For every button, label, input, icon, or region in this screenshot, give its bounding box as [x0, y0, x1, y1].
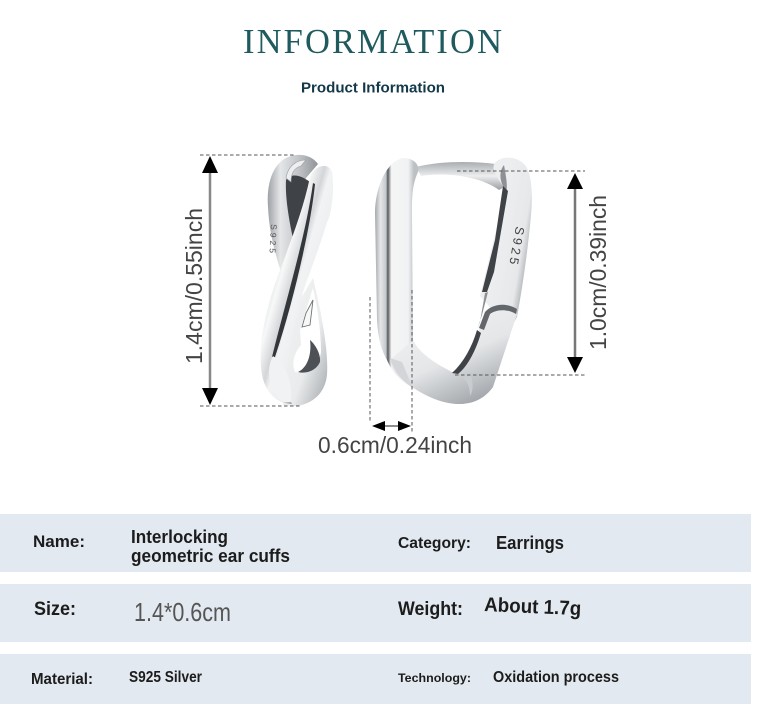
- right earring: front view: [375, 158, 532, 404]
- bottom lobe: [283, 278, 327, 406]
- value: technology: Oxidation process: [493, 669, 619, 686]
- inner dark edge: [452, 330, 481, 374]
- value: name: Interlocking: [131, 527, 228, 547]
- value: category: Earrings: [496, 533, 564, 553]
- bottom curve: [390, 308, 517, 404]
- dimension: inner height: [455, 171, 585, 375]
- value: size: 1.4*0.6cm: [134, 597, 231, 627]
- label: inner height: 1.0cm/0.39inch: [585, 195, 611, 350]
- panel: material and technology row: [0, 654, 751, 704]
- label: category: Category:: [398, 535, 471, 552]
- panel: size and weight row: [0, 584, 751, 642]
- top wire: [416, 162, 506, 190]
- title: INFORMATION: [243, 23, 502, 61]
- engraving: S925: S925: [267, 224, 279, 256]
- engraving: S925: S925: [506, 225, 527, 268]
- label: weight: Weight:: [398, 599, 463, 620]
- label: technology: Technology:: [398, 671, 471, 685]
- panel: name and category row: [0, 514, 751, 572]
- label: overall height: 1.4cm/0.55inch: [181, 208, 207, 364]
- left arm: [375, 158, 418, 388]
- subtitle: Product Information: [301, 80, 445, 96]
- dimension: width: [370, 290, 412, 433]
- dimension: overall height: [200, 155, 302, 406]
- left earring: side view: [261, 155, 333, 406]
- front strand: [261, 166, 333, 404]
- label: width: 0.6cm/0.24inch: [318, 432, 472, 458]
- value: name: geometric ear cuffs: [131, 546, 290, 566]
- clasp seam: [479, 305, 517, 330]
- right band: [480, 158, 532, 330]
- label: material: Material:: [31, 671, 93, 688]
- label: size: Size:: [34, 599, 76, 620]
- value: material: S925 Silver: [129, 669, 202, 686]
- value: weight: About 1.7g: [484, 594, 582, 620]
- back strand: [268, 155, 318, 272]
- label: name: Name:: [33, 532, 85, 551]
- value: name: [131, 527, 290, 566]
- clasp: [302, 300, 313, 327]
